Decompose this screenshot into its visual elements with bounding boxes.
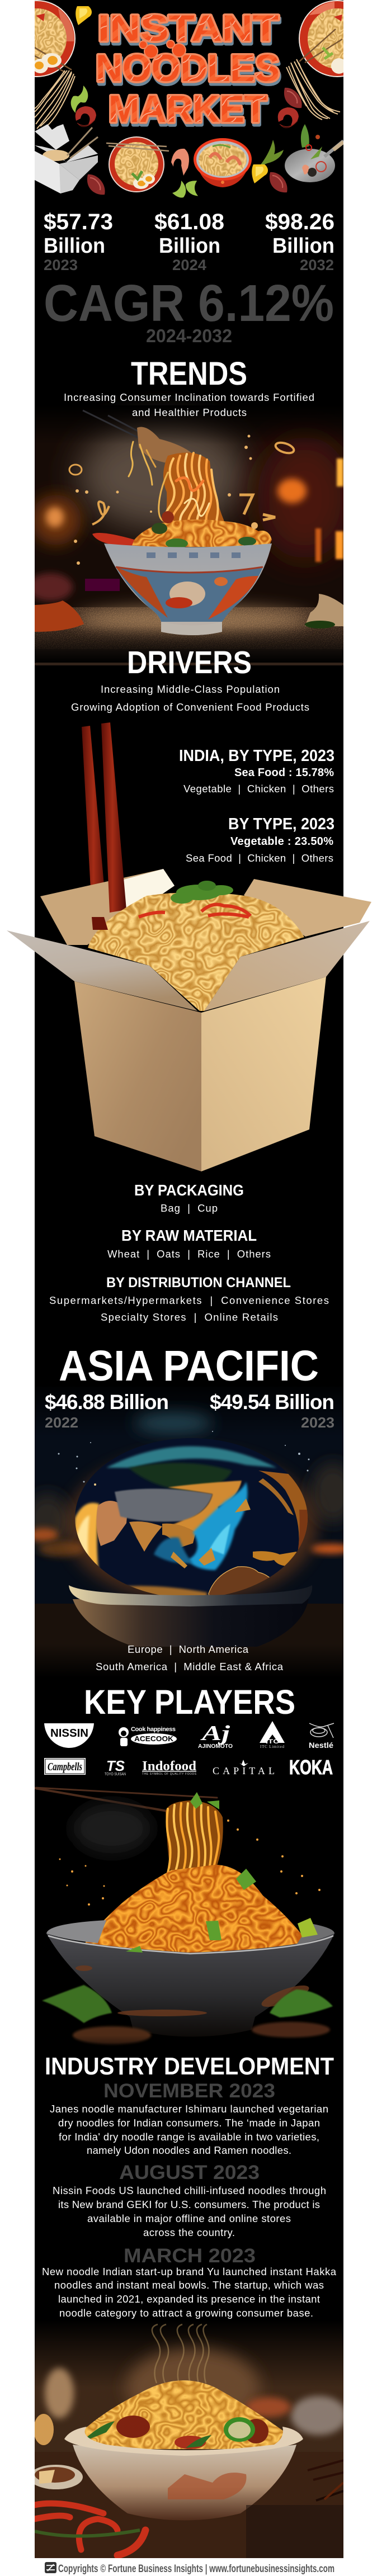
photo: noodle bowl on table [29,2320,347,2558]
vegetable pieces [152,511,256,549]
title line shadow [97,10,281,133]
logo Indofood: THE SYMBOL OF QUALITY FOODS [142,1773,197,1776]
title line main [96,7,280,130]
header illustration [0,0,376,199]
first chopstick front [92,917,108,930]
November 2023 text: namely Udon noodles and Ramen noodles. [87,2144,291,2156]
table shadow [246,2505,343,2558]
title line shadow: NOODLES [97,50,281,92]
logo Toyo Suisan: TOYO SUISAN [105,1773,126,1776]
noodle bundle left [35,70,75,129]
chopsticks on table [308,2460,343,2501]
left golden rim [75,1501,101,1568]
value 2032: Billion [272,234,334,258]
box left face [74,981,201,1171]
lifted noodle clump [137,427,193,464]
globe surface [74,1446,309,1599]
logo Koka: KOKA [289,1756,333,1779]
noodles in bowl [130,519,272,547]
logos [44,1721,334,1779]
steam noodles [152,2324,209,2383]
lifted noodles [128,441,224,522]
value 2032 [265,210,334,273]
logo ITC: ITC Limited [260,1745,284,1749]
green chilli [35,2530,140,2536]
footer background [0,2558,377,2576]
value 2024: 2024 [172,257,206,273]
central Asia grey [115,1488,213,1521]
ceramic bowl [104,543,272,635]
bowl body [46,1934,334,2036]
March 2023 text: launched in 2021, expanded its presence in the instant [58,2293,320,2305]
key players heading: KEY PLAYERS [84,1683,295,1721]
other regions: Europe | North America [128,1643,249,1655]
parsley topping [171,881,233,904]
logo Ajinomoto [198,1722,233,1750]
plate centre [106,136,169,192]
logo ITC [260,1721,285,1749]
drivers text: Increasing Middle-Class Population [101,683,280,695]
by type: BY TYPE, 2023 [228,815,334,833]
noodle mound [82,1865,313,1956]
bowl centre [194,138,252,187]
value 2023: $49.54 Billion [210,1391,334,1414]
logo Acecook: Cook happiness [131,1726,176,1733]
logo Campbells: Campbells [48,1761,82,1773]
China coast gold [168,1481,242,1540]
logo Acecook: ACECOOK [134,1734,174,1743]
logo Campbells [44,1758,86,1775]
industry development [42,2053,337,2319]
by distribution channel [49,1275,329,1323]
market values [44,210,334,273]
plate top left [35,0,76,77]
table [35,607,343,665]
by distribution channel: Supermarkets/Hypermarkets | Convenience Stores [49,1294,329,1306]
logo Nissin [44,1723,94,1748]
title line main: INSTANT [98,7,279,49]
title line main: MARKET [109,88,267,130]
right golden rim [258,1471,309,1566]
value 2024 [154,210,224,273]
logo Acecook [119,1726,177,1746]
by type [186,815,334,864]
CAGR: CAGR 6.12% [44,274,334,332]
logo Nissin: NISSIN [50,1727,88,1740]
trends text: and Healthier Products [132,407,247,418]
logo Toyo Suisan: TS [106,1757,125,1774]
plate top right [299,0,343,77]
edamame [261,140,284,164]
ember sparks [59,1819,321,1906]
photo: grey bowl with noodles [35,1788,343,2058]
August 2023 text: available in major offline and online stores [87,2213,291,2224]
logo Nestle: Nestlé [309,1741,333,1750]
by distribution channel: Specialty Stores | Online Retails [101,1311,278,1323]
globe glow [65,1451,317,1602]
chopsticks [83,410,143,439]
trends heading: TRENDS [131,356,247,392]
March 2023 text: noodles and instant meal bowls. The startup, which was [54,2279,324,2291]
by packaging: BY PACKAGING [134,1181,244,1199]
India by type: INDIA, BY TYPE, 2023 [179,747,334,765]
column base [166,1800,223,1873]
bowl rim [46,1920,334,1954]
back flaps [40,869,371,945]
India [129,1521,162,1552]
right front flap [204,921,370,1011]
logo Capital: CAPITAL [213,1765,275,1776]
background haze [35,2320,347,2558]
by packaging [134,1181,244,1214]
value 2023 [210,1391,334,1431]
spice scatter [35,2022,343,2058]
red spoon handle [92,533,134,547]
India by type: Sea Food : 15.78% [234,767,334,779]
noodle mound [84,2380,285,2449]
photo: globe in bowl [35,1400,343,1667]
value 2032: 2032 [300,257,334,273]
left front flap [7,930,197,1011]
bottom glow [95,1586,207,1599]
bright sea [187,1482,247,1570]
islands gold [171,1499,251,1568]
food sparks [74,435,258,565]
value 2024: $61.08 [154,210,224,234]
August 2023 text: its New brand GEKI for U.S. consumers. The product is [58,2199,320,2210]
logo Indofood: Indofood [142,1759,197,1774]
globe [75,1438,308,1598]
India by type: Vegetable | Chicken | Others [183,783,334,795]
value 2023: Billion [44,234,105,258]
side dish [29,2414,83,2489]
chopsticks [35,1788,217,1812]
August 2023 heading: AUGUST 2023 [119,2162,260,2183]
by raw material: BY RAW MATERIAL [121,1227,257,1244]
by raw material [107,1227,271,1260]
footer [0,2558,377,2576]
March 2023 text: New noodle Indian start-up brand Yu launched instant Hakka [42,2266,337,2277]
logo Ajinomoto: Aj [200,1722,230,1745]
trends text: Increasing Consumer Inclination towards Fortified [64,391,314,403]
trends [64,356,314,418]
November 2023 text: Janes noodle manufacturer Ishimaru launched vegetarian [50,2103,328,2115]
shrimp centre [171,149,189,176]
bowl body [73,2445,296,2521]
dark green land [129,1463,232,1492]
flying noodle rings [69,441,295,524]
leaves right [270,1989,333,2017]
box right face [201,977,326,1171]
photo: noodles lifted from bowl [28,405,352,665]
red chillies [35,2503,145,2555]
sausage and pepper toppings [81,2416,268,2449]
August 2023 text [53,2185,326,2238]
title line shadow: MARKET [110,91,268,133]
trends text [64,391,314,418]
bowl painting [168,2473,246,2499]
November 2023 heading: NOVEMBER 2023 [103,2080,275,2102]
value 2022: $46.88 Billion [45,1391,169,1414]
CAGR: 2024-2032 [146,325,232,346]
August 2023 text: Nissin Foods US launched chilli-infused noodles through [53,2185,326,2196]
title [96,7,281,133]
value 2022 [45,1391,169,1431]
noodles in box [88,892,304,1011]
March 2023 text [42,2266,337,2319]
bowl under globe [69,1585,312,1647]
value 2024: Billion [159,234,220,258]
logo Capital [213,1760,275,1776]
corn and onion bits [71,6,302,195]
value 2023 [44,210,113,273]
noodle shadow base [163,452,224,521]
Asia Pacific [45,1342,334,1672]
melon slices [172,181,198,198]
value 2023: 2023 [301,1414,334,1431]
Europe Africa tan [96,1501,128,1546]
noodle column [166,1800,223,1873]
herbs on noodles [126,1792,318,1953]
value 2022: 2022 [45,1414,78,1431]
smoke [73,1803,151,1854]
leaves left [42,1985,112,2023]
March 2023 text: noodle category to attract a growing consumer base. [59,2307,313,2319]
title line main: NOODLES [96,47,280,89]
globe stars [58,1431,310,1486]
noodle bundle right [286,59,340,120]
by type: Sea Food | Chicken | Others [186,852,333,864]
takeaway noodle box [35,124,98,193]
atmosphere [106,1446,277,1468]
chopstick back [82,726,108,930]
November 2023 text: for India' dry noodle range is available in two varieties, [59,2131,319,2143]
wok with vegetables [285,124,343,182]
Australia [209,1567,279,1599]
second chopstick [101,722,126,913]
logo Nestle [309,1723,334,1750]
Pacific islands gold [253,1551,299,1566]
March 2023 heading: MARCH 2023 [124,2245,256,2267]
background glows [28,422,352,601]
bowl rim [64,2427,303,2456]
dumplings and garnish [35,594,343,632]
noodle bubbles on O letters [139,40,186,58]
by packaging: Bag | Cup [161,1202,218,1214]
November 2023 text: dry noodles for Indian consumers. The ‘made in Japan [58,2117,320,2129]
drivers heading: DRIVERS [127,645,252,680]
title line shadow: INSTANT [99,10,280,51]
photo background [35,420,343,607]
value 2023: $57.73 [44,210,113,234]
red pepper topping [139,905,251,917]
by type: Vegetable : 23.50% [230,835,333,848]
drivers [71,645,309,713]
November 2023 text [50,2103,328,2156]
logo ITC: ITC [266,1738,279,1745]
Asia Pacific heading: ASIA PACIFIC [59,1342,319,1390]
India by type [179,747,334,795]
other regions: South America | Middle East & Africa [96,1661,284,1672]
drivers text [71,683,309,713]
value 2032: $98.26 [265,210,334,234]
chopsticks and noodle box [7,722,371,1171]
by raw material: Wheat | Oats | Rice | Others [107,1248,271,1260]
globe background [35,1400,343,1604]
industry heading: INDUSTRY DEVELOPMENT [45,2053,334,2080]
other regions [96,1643,284,1672]
footer logo icon [45,2562,56,2573]
August 2023 text: across the country. [143,2227,235,2238]
by distribution channel: BY DISTRIBUTION CHANNEL [106,1275,291,1291]
rust stain on bowl [76,1965,311,2016]
logo Ajinomoto: AJINOMOTO [198,1743,233,1750]
value 2023: 2023 [44,257,78,273]
drivers text: Growing Adoption of Convenient Food Products [71,701,309,713]
